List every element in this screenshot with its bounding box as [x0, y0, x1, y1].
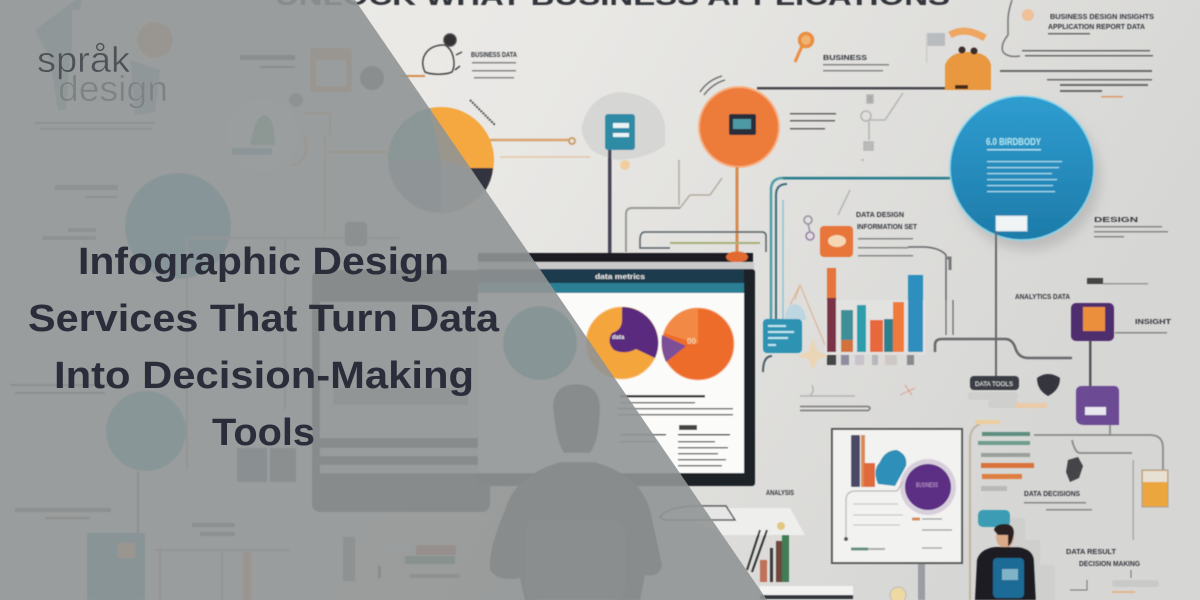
dark pill label — [970, 376, 1019, 390]
orange note — [1112, 591, 1135, 593]
icon: shield — [1037, 374, 1060, 396]
title line 2: Services That Turn Data — [28, 298, 500, 340]
right wiring — [1034, 425, 1163, 470]
board lines — [844, 482, 952, 549]
foot — [955, 85, 968, 89]
floor slab — [760, 586, 853, 599]
line — [1115, 332, 1167, 334]
gray horizontal line — [187, 238, 400, 470]
chair — [525, 520, 625, 600]
icon: calendar — [310, 48, 352, 92]
circle label: BUSINESS — [916, 483, 938, 489]
orange short bar — [864, 463, 875, 487]
panel: orange circle — [699, 76, 947, 254]
teal card — [763, 319, 802, 353]
pill — [1112, 580, 1159, 587]
title — [28, 241, 500, 454]
pale bell — [785, 304, 806, 320]
purple box — [1076, 386, 1119, 425]
board — [832, 429, 962, 563]
right pie chart — [662, 308, 734, 380]
header text: data metrics — [595, 274, 645, 281]
dark line — [757, 87, 947, 90]
label heading: DATA DESIGN — [856, 212, 904, 219]
left pie chart: data — [612, 335, 625, 341]
bottom right labels — [1066, 549, 1159, 593]
orange bars — [861, 435, 865, 487]
screen text — [618, 395, 733, 466]
links — [804, 216, 814, 240]
bar chart base squares — [827, 355, 914, 365]
pin label — [823, 55, 889, 72]
blue card — [87, 533, 145, 600]
left flow chart — [155, 548, 290, 600]
screen icon — [729, 114, 756, 135]
orange icon block — [804, 212, 918, 257]
logo word two: design — [58, 68, 168, 109]
lower blue circle — [106, 391, 186, 471]
body — [945, 52, 991, 90]
pale chart label — [800, 385, 855, 396]
gray wiring to bar chart — [908, 247, 1072, 358]
connector lines from pie — [470, 100, 590, 157]
orange connector — [736, 167, 738, 254]
title line 4: Tools — [212, 412, 315, 454]
small flag label: ANALYTICS DATA — [1015, 294, 1070, 301]
triangle wires — [790, 285, 825, 345]
hair — [994, 524, 1014, 546]
blue cloud — [875, 450, 906, 486]
head sketch icon — [1066, 457, 1083, 482]
scribble — [700, 76, 725, 95]
body — [975, 547, 1036, 600]
lines — [858, 238, 913, 256]
backpack — [993, 558, 1024, 598]
pale blob — [828, 235, 846, 247]
purple circle — [905, 464, 951, 510]
orange character — [926, 31, 991, 90]
icon: small circle — [289, 93, 303, 107]
orange disc — [699, 87, 779, 167]
dark pill label: DATA TOOLS — [975, 382, 1013, 388]
thin line — [1132, 460, 1134, 540]
books — [760, 535, 789, 582]
purple icon block — [1071, 303, 1172, 386]
icon: shield — [345, 222, 367, 246]
logo word one: språk — [37, 39, 131, 80]
circle title: 6.0 BIRDBODY — [986, 137, 1041, 148]
rounded double bar — [800, 406, 870, 410]
orange connector paths — [290, 113, 400, 235]
left monitor — [312, 270, 490, 512]
faded left artwork — [10, 0, 494, 600]
backpack tag — [1002, 569, 1018, 580]
man with backpack — [975, 510, 1055, 600]
label lines — [240, 55, 295, 68]
small flag label — [1015, 278, 1148, 301]
person silhouette — [490, 384, 662, 600]
small bars — [237, 448, 296, 482]
head — [553, 384, 600, 453]
desk top — [665, 508, 805, 535]
bar chart — [825, 268, 925, 365]
top black bar — [478, 253, 753, 262]
subheading text: APPLICATION REPORT DATA — [1048, 24, 1145, 31]
peach blob — [1022, 9, 1034, 21]
label subheading: INFORMATION SET — [857, 224, 918, 231]
chart haze — [825, 300, 925, 354]
title line 3: Into Decision-Making — [54, 355, 474, 397]
small gray icons and links — [838, 93, 903, 215]
pin label: BUSINESS — [823, 55, 867, 62]
hook — [1002, 0, 1020, 56]
circle text lines — [987, 149, 1062, 192]
disc — [950, 96, 1094, 240]
cross icon — [900, 385, 915, 395]
yellow dot — [777, 522, 785, 530]
presentation board — [832, 429, 962, 600]
pale star — [797, 339, 830, 370]
body — [490, 462, 662, 600]
lower text — [10, 384, 235, 536]
heading text: BUSINESS DESIGN INSIGHTS — [1050, 14, 1154, 21]
icon: orange gear — [137, 22, 173, 58]
dark connector — [608, 150, 612, 253]
lower small items — [800, 385, 915, 410]
gray diagonal overlay — [0, 0, 767, 600]
hat arcs — [950, 31, 985, 38]
label: bulb text — [471, 52, 517, 78]
dark bar — [851, 435, 860, 487]
yellow pin — [890, 587, 906, 600]
label: ANALYSIS — [766, 490, 794, 497]
label right of circle: DESIGN — [1094, 217, 1138, 224]
logo — [37, 39, 168, 109]
pole — [918, 563, 925, 600]
label: bulb text: BUSINESS DATA — [471, 52, 517, 59]
connector line — [137, 471, 139, 535]
top right text block — [1000, 0, 1154, 98]
gray blob — [582, 92, 665, 160]
connector — [1089, 341, 1092, 386]
sketch label: DATA DECISIONS — [1024, 491, 1080, 498]
label right of circle — [1094, 217, 1168, 238]
left pie chart — [586, 307, 658, 379]
teal icon — [605, 114, 635, 150]
shadow — [956, 106, 1100, 250]
pale badges — [968, 392, 1047, 408]
blue circle panel — [950, 96, 1100, 377]
title line 1: Infographic Design — [78, 241, 449, 283]
sketch label — [1024, 491, 1092, 510]
orange box — [1142, 470, 1168, 507]
small pie chart — [388, 107, 494, 213]
bars — [827, 268, 923, 352]
label: INSIGHT — [1135, 319, 1172, 326]
monitor — [478, 252, 755, 486]
heading: DATA RESULT — [1066, 549, 1117, 556]
teal stripe — [478, 283, 744, 293]
orange square — [820, 226, 853, 257]
faded circle on screen — [503, 306, 577, 380]
right pie chart: 00 — [687, 337, 696, 346]
white screen — [478, 293, 744, 473]
teal connector into blue circle — [783, 177, 951, 180]
icon: hand-drawn bulb — [400, 34, 462, 76]
face — [996, 526, 1014, 548]
subheading: DECISION MAKING — [1079, 561, 1141, 568]
icon: speech bubble — [226, 99, 298, 171]
outer — [1071, 303, 1114, 341]
teal wiring — [771, 178, 950, 322]
screen header — [478, 269, 744, 283]
card text — [768, 325, 794, 346]
orange pin icon — [795, 34, 812, 62]
dark frame — [478, 269, 755, 486]
flag pole — [926, 33, 928, 63]
desk legs — [747, 530, 767, 572]
inner orange — [1083, 307, 1105, 331]
body lines — [1000, 33, 1153, 98]
laptop — [660, 506, 735, 520]
side lines — [790, 113, 836, 130]
gray connector wiring — [626, 160, 766, 252]
stepped shadow — [1010, 518, 1055, 600]
horizontal coloured bars — [970, 420, 1034, 600]
yellow dot — [620, 160, 630, 170]
white tag — [996, 216, 1027, 231]
halo — [900, 459, 956, 515]
desk with laptop and books — [660, 490, 805, 582]
silver bar — [478, 262, 754, 269]
bottom orange pin — [243, 552, 251, 600]
flag — [927, 33, 945, 46]
panel: gray blob with teal icon — [582, 92, 665, 253]
left text block one — [35, 122, 155, 240]
icon: gear — [360, 66, 384, 90]
heads — [958, 46, 978, 54]
blue circle — [125, 173, 231, 279]
bottom bars — [343, 537, 460, 581]
speech badge — [978, 510, 1010, 527]
vertical connector — [995, 231, 997, 377]
icon: map figure — [35, 0, 160, 115]
line — [1070, 570, 1131, 590]
hook — [763, 356, 772, 372]
side chart icon — [763, 285, 830, 372]
orange cap — [726, 252, 748, 262]
